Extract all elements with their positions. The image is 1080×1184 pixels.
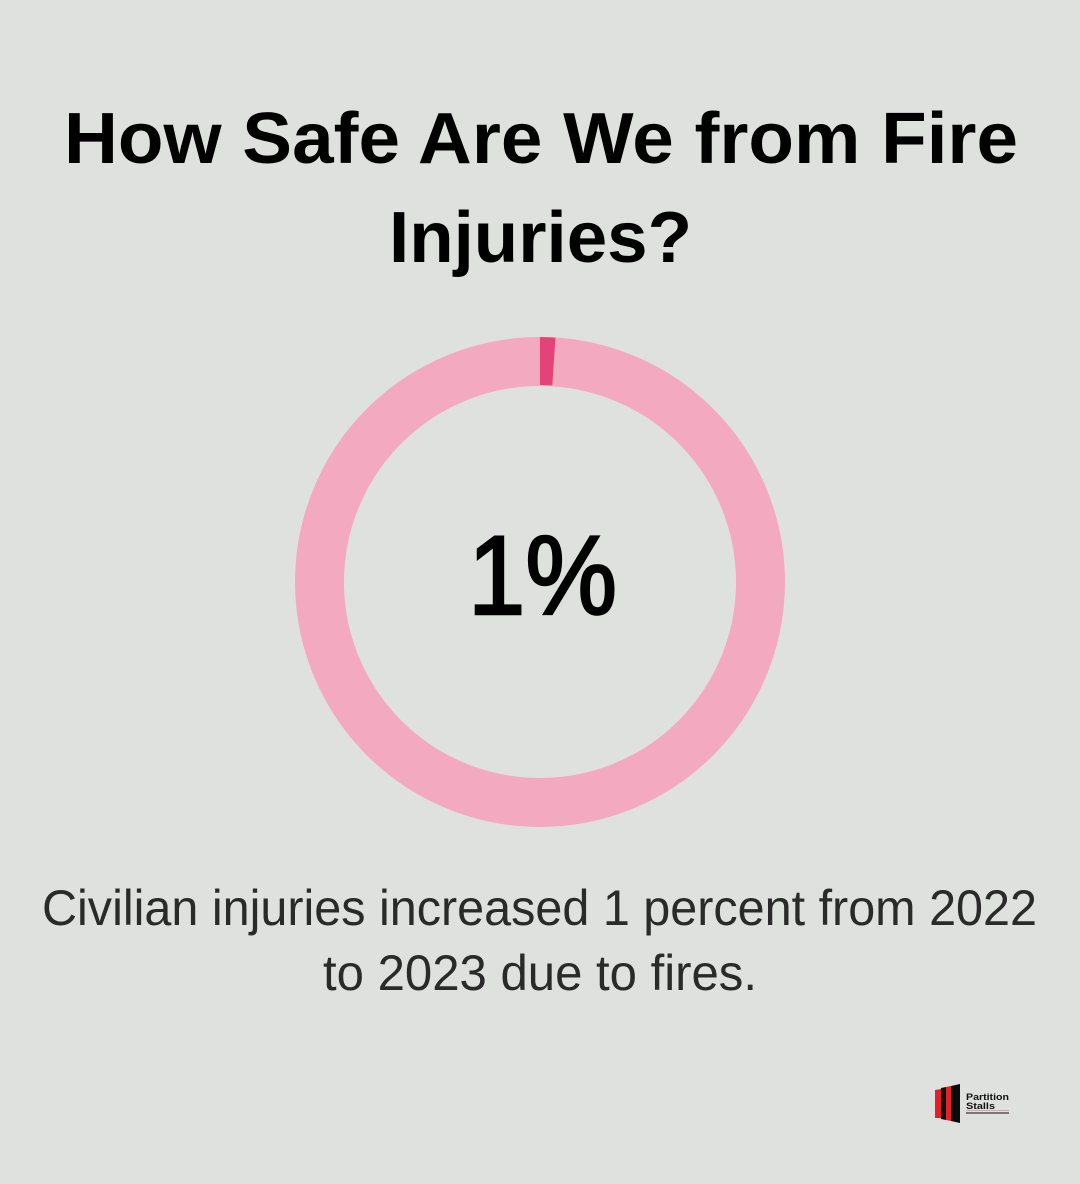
donut chart bbox=[320, 337, 760, 802]
title: Injuries? bbox=[389, 198, 692, 278]
center value: 1% bbox=[468, 513, 617, 638]
title bbox=[64, 99, 1018, 278]
ring: 1 percent segment bbox=[540, 337, 555, 385]
icon: partition panels bbox=[935, 1084, 960, 1123]
title: How Safe Are We from Fire bbox=[64, 99, 1018, 179]
logo wordmark bbox=[966, 1092, 1009, 1114]
logo wordmark: Stalls bbox=[966, 1101, 995, 1111]
description text: Civilian injuries increased 1 percent from 2022 bbox=[42, 880, 1037, 936]
logo: Partition Stalls bbox=[935, 1084, 1009, 1123]
description text: to 2023 due to fires. bbox=[323, 945, 757, 1001]
description text bbox=[42, 880, 1037, 1001]
ring: remaining share bbox=[320, 362, 760, 802]
logo wordmark: Partition bbox=[966, 1092, 1009, 1102]
